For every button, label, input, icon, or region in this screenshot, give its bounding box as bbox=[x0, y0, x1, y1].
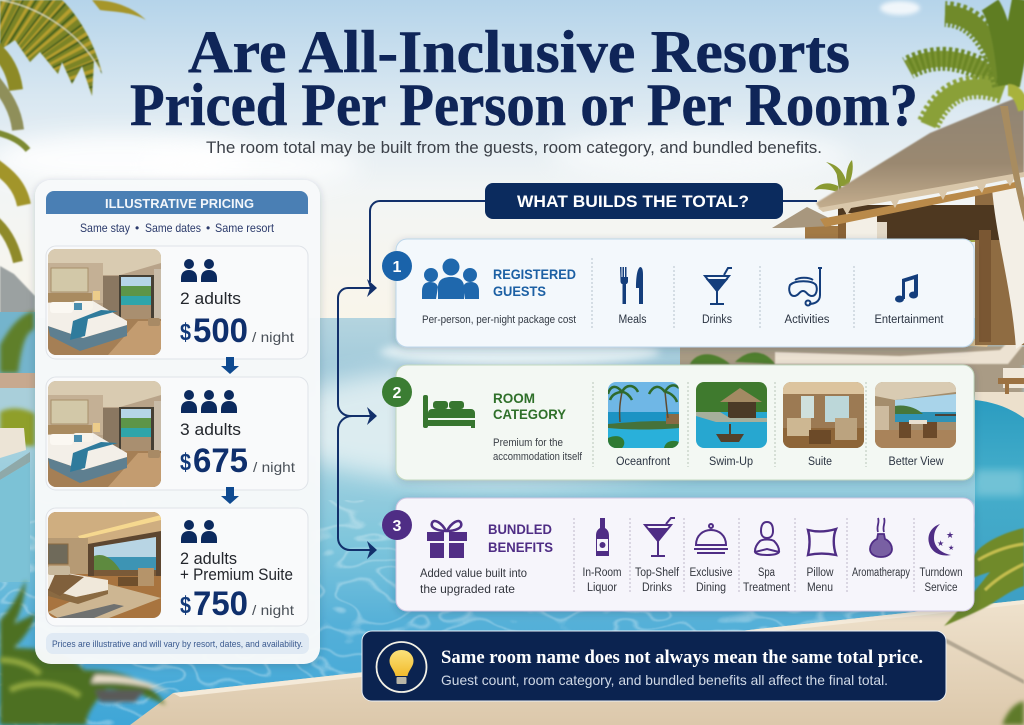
registered guests title: REGISTERED bbox=[493, 266, 576, 282]
feature labels bbox=[618, 314, 944, 326]
badge 2 bbox=[382, 377, 412, 407]
benefit labels: Turndown bbox=[920, 567, 962, 579]
registered guests title bbox=[493, 266, 576, 299]
badge 3: 3 bbox=[393, 518, 402, 535]
room category title: ROOM bbox=[493, 390, 535, 406]
icon: snorkel mask bbox=[789, 268, 822, 306]
benefit labels: Service bbox=[924, 582, 958, 594]
badge 2: 2 bbox=[393, 385, 402, 402]
room description: accommodation itself bbox=[493, 451, 583, 463]
room category title: CATEGORY bbox=[493, 406, 567, 422]
pricing header: ILLUSTRATIVE PRICING bbox=[105, 197, 254, 211]
section heading: WHAT BUILDS THE TOTAL? bbox=[517, 193, 749, 211]
badge 1: 1 bbox=[393, 259, 402, 276]
icon: light bulb bbox=[376, 642, 426, 692]
title: Priced Per Person or Per Room? bbox=[130, 72, 918, 138]
bundled benefits title bbox=[488, 521, 553, 555]
photo: better view bbox=[875, 382, 956, 448]
panel 1: registered guests bbox=[382, 239, 974, 347]
callout: key takeaway bbox=[362, 631, 946, 701]
benefits description bbox=[420, 566, 527, 596]
price card: 3 adults: 3 adults bbox=[180, 420, 241, 439]
connector arrows bbox=[338, 201, 817, 559]
benefits description: Added value built into bbox=[420, 566, 527, 580]
benefit labels: Dining bbox=[696, 582, 726, 594]
icon: liquor bottle bbox=[596, 518, 609, 556]
icon: spa bbox=[755, 522, 779, 555]
benefit labels bbox=[582, 567, 962, 594]
disclaimer: Prices are illustrative and will vary by resort, dates, and availability. bbox=[52, 639, 303, 650]
palm crown right bbox=[908, 0, 1024, 125]
pricing conditions: Same resort bbox=[215, 221, 275, 235]
room labels: Suite bbox=[808, 456, 832, 468]
price card: premium suite: / night bbox=[252, 602, 294, 618]
price card: 3 adults: $ bbox=[180, 449, 192, 476]
guests description: Per-person, per-night package cost bbox=[422, 314, 576, 326]
icon: moon and stars: ★ bbox=[948, 544, 954, 552]
title: Are All-Inclusive Resorts bbox=[188, 19, 850, 85]
subtitle: The room total may be built from the guests, room category, and bundled benefits. bbox=[206, 139, 822, 157]
benefit labels: Spa bbox=[758, 567, 775, 579]
title bbox=[130, 19, 918, 138]
icon: top-shelf drink bbox=[645, 518, 675, 556]
room labels: Swim-Up bbox=[709, 456, 753, 468]
benefit labels: Drinks bbox=[642, 582, 672, 594]
price card: 3 adults: 675 bbox=[193, 442, 248, 480]
badge 1 bbox=[382, 251, 412, 281]
price card: 3 adults bbox=[46, 377, 308, 490]
feature labels: Entertainment bbox=[874, 314, 944, 326]
price card: 2 adults: 500 bbox=[193, 312, 248, 350]
callout: key takeaway: Same room name does not always mean the same total price. bbox=[441, 647, 923, 668]
icon: moon and stars: ★ bbox=[946, 530, 954, 540]
benefit labels: Treatment bbox=[743, 582, 791, 594]
disclaimer bbox=[46, 633, 309, 654]
room labels: Oceanfront bbox=[616, 456, 671, 468]
room description: Premium for the bbox=[493, 437, 563, 449]
bundled benefits title: BENEFITS bbox=[488, 539, 553, 555]
price card: 2 adults: 2 adults bbox=[180, 289, 241, 308]
room labels: Better View bbox=[888, 456, 944, 468]
room category title bbox=[493, 390, 567, 422]
suite photo bbox=[48, 512, 161, 618]
photo: swim-up bbox=[696, 382, 767, 448]
price card: premium suite: + Premium Suite bbox=[180, 566, 293, 584]
pricing conditions: Same stay bbox=[80, 221, 130, 235]
benefit labels: Pillow bbox=[806, 567, 834, 579]
icon: aromatherapy bbox=[870, 518, 892, 557]
icon: music note bbox=[895, 274, 918, 302]
badge 3 bbox=[382, 510, 412, 540]
arrow down bbox=[221, 357, 239, 374]
pricing conditions: • bbox=[135, 221, 139, 235]
benefit labels: Exclusive bbox=[690, 567, 732, 579]
pricing conditions bbox=[80, 221, 275, 235]
feature labels: Activities bbox=[784, 314, 830, 326]
icon: bed bbox=[423, 395, 475, 428]
icon: pillow bbox=[808, 529, 836, 555]
icon: moon and stars bbox=[928, 524, 954, 555]
room description bbox=[493, 437, 583, 463]
benefit labels: Top-Shelf bbox=[635, 567, 680, 579]
panel 3: bundled benefits bbox=[382, 498, 974, 611]
price card: premium suite: 750 bbox=[193, 585, 248, 623]
icon: meals bbox=[620, 267, 643, 304]
callout: key takeaway: Guest count, room category, and bundled benefits all affect the final total. bbox=[441, 672, 888, 688]
price card: 2 adults bbox=[46, 246, 308, 359]
registered guests title: GUESTS bbox=[493, 283, 546, 299]
photo: oceanfront bbox=[608, 382, 679, 448]
price card: premium suite: $ bbox=[180, 592, 192, 619]
panel: illustrative pricing bbox=[35, 180, 320, 664]
price card: 3 adults: / night bbox=[253, 459, 295, 475]
price card: premium suite: 2 adults bbox=[180, 550, 237, 568]
arrow down bbox=[221, 487, 239, 504]
feature labels: Meals bbox=[618, 314, 647, 326]
icon: dining cloche bbox=[694, 524, 728, 553]
section heading bbox=[485, 183, 783, 219]
photo: suite bbox=[783, 382, 864, 448]
feature labels: Drinks bbox=[702, 314, 732, 326]
price card: 2 adults: / night bbox=[252, 329, 294, 345]
bundled benefits title: BUNDLED bbox=[488, 521, 552, 537]
icon: guests bbox=[422, 258, 479, 299]
benefit labels: Liquor bbox=[587, 582, 617, 594]
benefit labels: Aromatherapy bbox=[852, 567, 910, 579]
palm fronds left bbox=[0, 0, 146, 262]
pricing conditions: • bbox=[206, 221, 210, 235]
pricing header bbox=[46, 191, 308, 214]
room labels bbox=[616, 456, 944, 468]
price card: premium suite bbox=[46, 508, 308, 626]
pricing conditions: Same dates bbox=[145, 221, 201, 235]
icon: gift bbox=[427, 521, 467, 558]
icon: moon and stars: ★ bbox=[937, 539, 944, 548]
panel 2: room category bbox=[382, 365, 974, 480]
icon: drinks bbox=[705, 268, 732, 304]
benefits description: the upgraded rate bbox=[420, 582, 515, 596]
benefit labels: Menu bbox=[807, 582, 833, 594]
benefit labels: In-Room bbox=[582, 567, 622, 579]
price card: 2 adults: $ bbox=[180, 319, 192, 346]
